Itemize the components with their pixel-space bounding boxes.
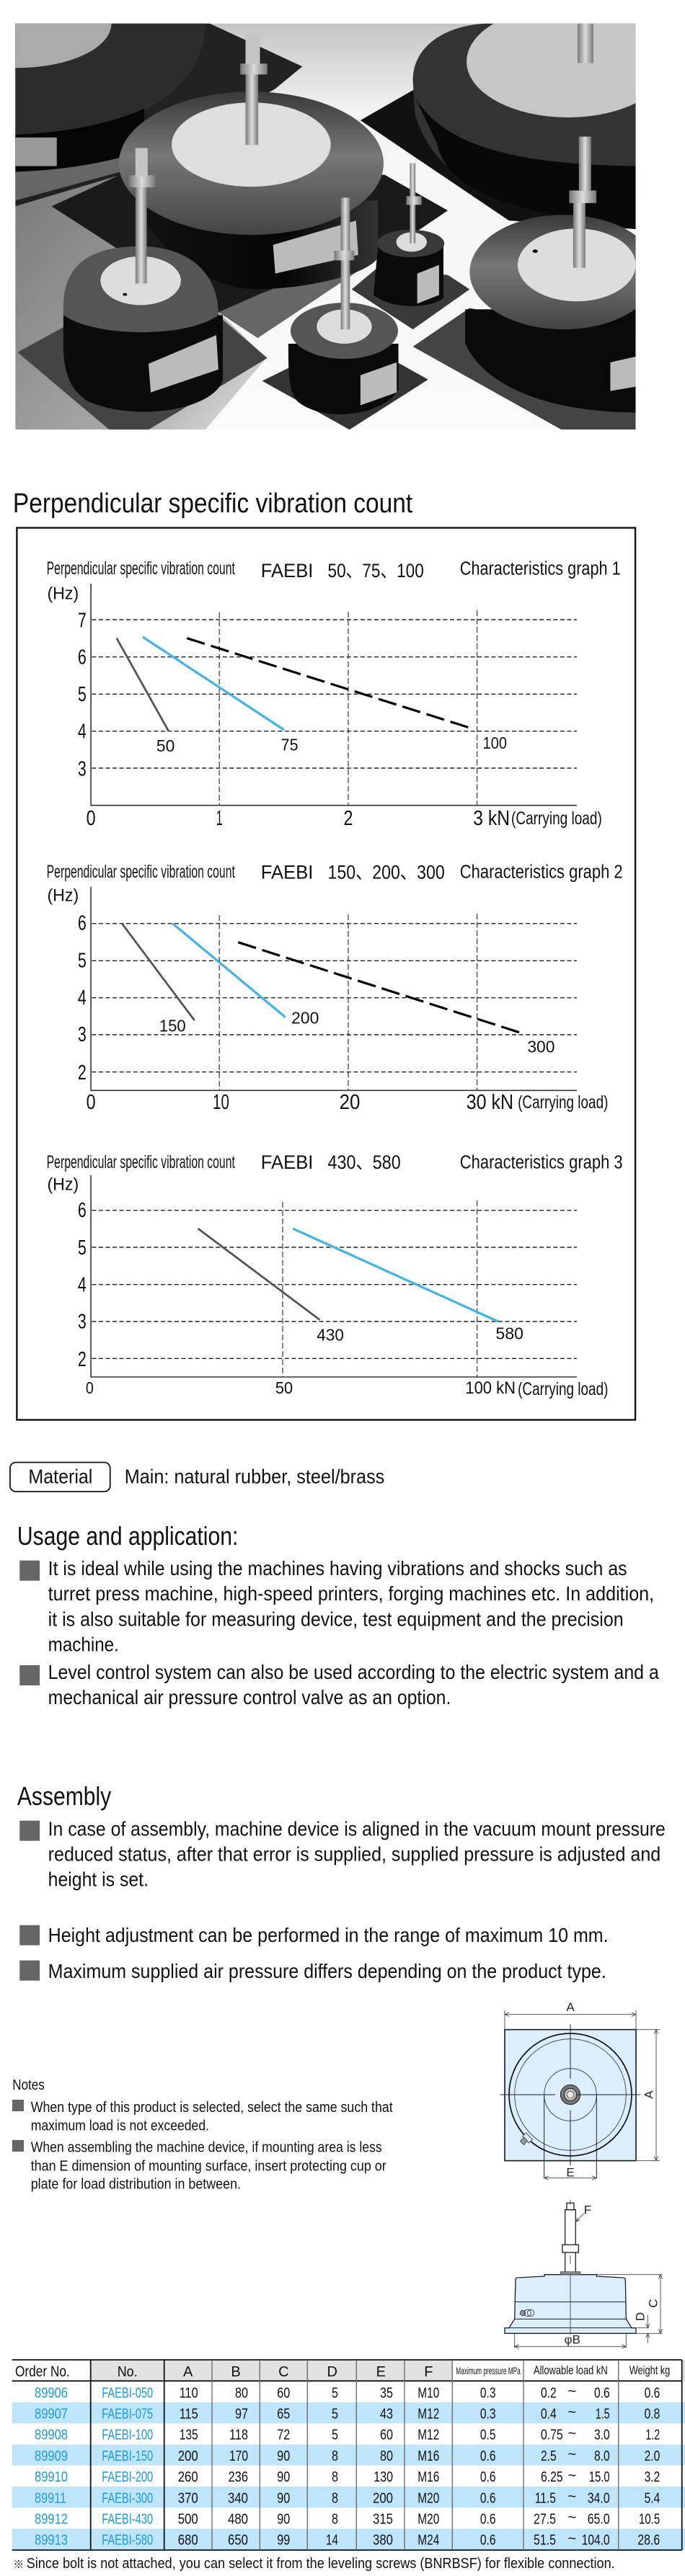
mount: center large	[51, 35, 448, 338]
table header row: A	[183, 2364, 193, 2380]
chart: characteristics graph 2: 150、200、300	[328, 861, 445, 883]
row: FAEBI-580: 680	[178, 2533, 198, 2549]
row: FAEBI-050: 110	[180, 2385, 198, 2401]
chart: characteristics graph 3: Perpendicular specific vibration count	[47, 1152, 235, 1172]
chart: characteristics graph 2: 6	[78, 912, 87, 935]
notes: When type of this product is selected, select the same such that	[31, 2099, 393, 2116]
row: FAEBI-050: 5	[332, 2385, 338, 2401]
row: FAEBI-200: 260	[178, 2469, 198, 2485]
row: FAEBI-075: 43	[380, 2407, 393, 2423]
row: FAEBI-430: 65.0	[588, 2512, 610, 2528]
row: FAEBI-050: 0.6	[594, 2385, 610, 2401]
row: FAEBI-580: 0.6	[480, 2533, 496, 2549]
row: FAEBI-050: 80	[235, 2385, 248, 2401]
row: FAEBI-430: 480	[228, 2512, 248, 2528]
row: FAEBI-300: 5.4	[645, 2490, 660, 2506]
chart: characteristics graph 3: 430	[317, 1326, 344, 1345]
row: FAEBI-200: FAEBI-200	[102, 2469, 153, 2485]
chart: characteristics graph 1: Characteristics graph 1	[460, 558, 621, 579]
row: FAEBI-150: 80	[380, 2448, 393, 2464]
chart: characteristics graph 3: 0	[86, 1378, 94, 1397]
chart: characteristics graph 2: (Carrying load)	[518, 1092, 608, 1113]
table header row: C	[278, 2364, 289, 2380]
row: FAEBI-075: 0.8	[645, 2407, 660, 2423]
chart: characteristics graph 1: 100	[483, 734, 507, 752]
row: FAEBI-300: FAEBI-300	[102, 2490, 153, 2506]
row: FAEBI-300: 90	[277, 2490, 290, 2506]
table header row: Order No.	[15, 2363, 70, 2380]
chart: characteristics graph 1: 50	[156, 736, 174, 755]
row: FAEBI-150: 8	[332, 2448, 338, 2464]
row: FAEBI-100: 1.2	[645, 2428, 660, 2443]
chart: characteristics graph 2: 10	[213, 1091, 229, 1114]
row: FAEBI-580: 99	[277, 2533, 290, 2549]
row: FAEBI-100: 5	[332, 2428, 338, 2443]
table header row: B	[231, 2364, 241, 2380]
row: FAEBI-150: 2.5	[541, 2448, 557, 2464]
row: FAEBI-050: ~	[567, 2384, 576, 2399]
chart: characteristics graph 3: 580	[496, 1324, 523, 1342]
diagram: top view with dimensions: A	[642, 2090, 656, 2099]
row: FAEBI-150: ~	[567, 2447, 576, 2463]
row: FAEBI-300: 370	[178, 2490, 198, 2506]
row: FAEBI-050: 60	[277, 2385, 290, 2401]
chart: characteristics graph 2: FAEBI	[261, 861, 313, 883]
notes: maximum load is not exceeded.	[31, 2118, 209, 2134]
material label	[10, 1463, 110, 1492]
chart: characteristics graph 2: 20	[340, 1091, 360, 1114]
row: FAEBI-150: 8.0	[594, 2448, 610, 2464]
row: FAEBI-580: 14	[326, 2533, 338, 2549]
row: FAEBI-150: 90	[277, 2448, 290, 2464]
chart: characteristics graph 1: 75	[281, 735, 299, 754]
notes: than E dimension of mounting surface, insert protecting cup or	[31, 2157, 386, 2174]
diagram: side view with dimensions: C	[647, 2299, 660, 2308]
row: FAEBI-430: 8	[332, 2512, 338, 2528]
row: FAEBI-200: 0.6	[480, 2469, 496, 2485]
chart: characteristics graph 1: 6	[78, 646, 87, 669]
chart: characteristics graph 2: Perpendicular specific vibration count	[47, 862, 235, 882]
table header row	[15, 2363, 670, 2380]
row: FAEBI-300: 8	[332, 2490, 338, 2506]
heading: assembly: Assembly	[17, 1781, 111, 1811]
row: FAEBI-200: ~	[567, 2468, 576, 2484]
row: FAEBI-100: 60	[380, 2428, 393, 2443]
row: FAEBI-075: 89907	[35, 2407, 68, 2423]
footnote: Since bolt is not attached, you can select it from the leveling screws (BNRBSF) for flexible connection.	[27, 2556, 615, 2572]
notes	[12, 2077, 393, 2193]
row: FAEBI-580: 650	[228, 2533, 248, 2549]
row: FAEBI-580: 28.6	[637, 2533, 660, 2549]
row: FAEBI-100: 0.75	[541, 2428, 563, 2443]
row: FAEBI-100: 0.5	[480, 2428, 496, 2443]
mount: front center	[262, 197, 428, 429]
row: FAEBI-430: 500	[178, 2512, 198, 2528]
row: FAEBI-100: FAEBI-100	[102, 2428, 153, 2443]
row: FAEBI-300: 34.0	[588, 2490, 610, 2506]
row: FAEBI-580: ~	[567, 2531, 576, 2546]
row: FAEBI-075: 0.3	[480, 2407, 496, 2423]
chart: characteristics graph 3: 2	[78, 1348, 87, 1371]
row: FAEBI-075: 0.4	[541, 2407, 557, 2423]
chart: characteristics graph 3: (Carrying load)	[518, 1379, 608, 1399]
text block: usage: It is ideal while using the machines having vibrations and shocks such as	[48, 1557, 627, 1579]
diagram: top view with dimensions: E	[566, 2166, 575, 2180]
row: FAEBI-150: 89909	[35, 2448, 68, 2464]
chart: characteristics graph 2: 150	[159, 1017, 186, 1035]
row: FAEBI-075: 1.5	[596, 2407, 610, 2423]
row: FAEBI-580	[35, 2531, 660, 2549]
row: FAEBI-300: 89911	[35, 2490, 66, 2506]
row: FAEBI-430: 89912	[35, 2512, 68, 2528]
row: FAEBI-050: 0.2	[541, 2385, 557, 2401]
row: FAEBI-150: 200	[178, 2448, 198, 2464]
chart: characteristics graph 1: (Hz)	[47, 584, 79, 604]
table header row: D	[327, 2364, 337, 2380]
table grid lines	[12, 2360, 682, 2550]
row: FAEBI-300: 340	[228, 2490, 248, 2506]
chart: characteristics graph 3: 100 kN	[465, 1378, 516, 1398]
diagram: side view with dimensions	[505, 2200, 663, 2348]
table header row: Allowable load kN	[534, 2363, 608, 2377]
mount: top left	[15, 23, 303, 206]
row: FAEBI-430: M20	[417, 2512, 439, 2528]
row: FAEBI-100	[35, 2425, 660, 2443]
chart: characteristics graph 2: 5	[78, 950, 87, 973]
chart: characteristics graph 1: 2	[344, 807, 353, 830]
row: FAEBI-100: 89908	[35, 2428, 68, 2443]
chart: characteristics graph 1: 7	[78, 610, 87, 633]
row: FAEBI-050: 35	[380, 2385, 393, 2401]
chart: characteristics graph 3: 3	[78, 1310, 87, 1333]
diagram: top view with dimensions: A	[566, 2000, 575, 2014]
row: FAEBI-200: 236	[228, 2469, 248, 2485]
row: FAEBI-200: 130	[374, 2469, 393, 2485]
text block: usage: it is also suitable for measuring device, test equipment and the precision	[48, 1608, 624, 1630]
table header row: No.	[118, 2364, 138, 2380]
table header row: E	[376, 2364, 386, 2380]
row: FAEBI-200: 90	[277, 2469, 290, 2485]
row: FAEBI-300: M20	[417, 2490, 439, 2506]
row: FAEBI-300: 200	[373, 2490, 393, 2506]
chart: characteristics graph 1: 3 kN	[473, 807, 510, 830]
photo: vibration mounts	[15, 23, 636, 429]
material label: Material	[28, 1465, 92, 1487]
row: FAEBI-430	[35, 2510, 660, 2528]
row: FAEBI-150	[35, 2447, 660, 2464]
mount: front right	[413, 137, 658, 429]
chart: characteristics graph 2	[47, 861, 623, 1114]
row: FAEBI-300	[35, 2489, 660, 2506]
row: FAEBI-050	[35, 2384, 660, 2401]
table header row: Maximum pressure MPa	[456, 2365, 521, 2376]
notes: plate for load distribution in between.	[31, 2176, 241, 2193]
row: FAEBI-075	[35, 2405, 660, 2423]
chart: characteristics graph 1: Perpendicular specific vibration count	[47, 558, 235, 579]
row: FAEBI-100: M12	[417, 2428, 439, 2443]
chart: characteristics graph 2: 4	[78, 986, 87, 1010]
chart: characteristics graph 2: 200	[291, 1009, 319, 1028]
row: FAEBI-100: 3.0	[594, 2428, 610, 2443]
row: FAEBI-430: 0.6	[480, 2512, 496, 2528]
chart: characteristics graph 1: 4	[78, 721, 87, 744]
notes: Notes	[12, 2077, 45, 2093]
row: FAEBI-580: FAEBI-580	[102, 2533, 153, 2549]
chart: characteristics graph 2: 0	[87, 1091, 96, 1114]
row: FAEBI-050: 89906	[35, 2385, 68, 2401]
row: FAEBI-050: FAEBI-050	[102, 2385, 153, 2401]
row: FAEBI-075: 97	[235, 2407, 248, 2423]
row: FAEBI-430: 10.5	[639, 2512, 660, 2528]
table backgrounds	[12, 2360, 685, 2550]
section heading: perpendicular specific vibration count: Perpendicular specific vibration count	[13, 489, 413, 519]
chart: characteristics graph 2: Characteristics graph 2	[460, 862, 623, 883]
row: FAEBI-150: M16	[417, 2448, 439, 2464]
chart: characteristics graph 2: 2	[78, 1061, 87, 1084]
material text: Main: natural rubber, steel/brass	[125, 1465, 384, 1487]
text block: assembly	[19, 1818, 666, 1982]
row: FAEBI-430: 315	[373, 2512, 393, 2528]
text block: assembly: height is set.	[48, 1868, 149, 1891]
chart: characteristics graph 2: 30 kN	[467, 1091, 513, 1114]
chart: characteristics graph 3: 430、580	[328, 1151, 401, 1173]
row: FAEBI-100: 118	[229, 2428, 248, 2443]
row: FAEBI-580: 51.5	[534, 2533, 556, 2549]
row: FAEBI-150: 2.0	[645, 2448, 660, 2464]
row: FAEBI-100: 72	[277, 2428, 290, 2443]
row: FAEBI-580: M24	[417, 2533, 439, 2549]
chart: characteristics graph 3: 4	[78, 1273, 87, 1296]
row: FAEBI-150: 170	[229, 2448, 248, 2464]
row: FAEBI-050: 0.3	[480, 2385, 496, 2401]
row: FAEBI-050: 0.6	[645, 2385, 660, 2401]
chart: characteristics graph 2: (Hz)	[47, 886, 79, 906]
mount: small rear	[352, 164, 469, 329]
diagram: side view with dimensions: φB	[565, 2333, 580, 2347]
row: FAEBI-580: 380	[373, 2533, 393, 2549]
text block: usage: machine.	[48, 1634, 119, 1656]
chart: characteristics graph 1: 50、75、100	[328, 560, 424, 581]
row: FAEBI-075: 115	[180, 2407, 198, 2423]
specification table	[12, 2360, 685, 2550]
diagram: top view with dimensions	[500, 2000, 660, 2180]
chart: characteristics graph 1: 0	[87, 807, 96, 830]
text block: assembly: Height adjustment can be performed in the range of maximum 10 mm.	[48, 1924, 609, 1946]
text block: usage	[19, 1557, 659, 1708]
diagram: side view with dimensions: D	[634, 2312, 648, 2321]
chart: characteristics graph 3: 6	[78, 1199, 87, 1222]
chart: characteristics graph 2: 3	[78, 1023, 87, 1046]
text block: usage: mechanical air pressure control valve as an option.	[48, 1686, 451, 1708]
table header row: F	[424, 2364, 433, 2380]
row: FAEBI-200: 89910	[35, 2469, 68, 2485]
chart: characteristics graph 1	[47, 558, 621, 830]
chart: characteristics graph 3: (Hz)	[47, 1175, 79, 1195]
chart: characteristics graph 3: Characteristics graph 3	[460, 1152, 623, 1173]
row: FAEBI-075: FAEBI-075	[102, 2407, 153, 2423]
row: FAEBI-200	[35, 2468, 660, 2485]
chart: characteristics graph 1: 1	[216, 807, 223, 830]
footnote: ※	[13, 2559, 24, 2571]
row: FAEBI-430: 90	[277, 2512, 290, 2528]
diagram: side view with dimensions: F	[584, 2203, 591, 2216]
row: FAEBI-430: FAEBI-430	[102, 2512, 153, 2528]
row: FAEBI-200: 15.0	[589, 2469, 610, 2485]
row: FAEBI-300: ~	[567, 2489, 576, 2505]
text block: assembly: Maximum supplied air pressure differs depending on the product type.	[48, 1960, 606, 1982]
row: FAEBI-300: 0.6	[480, 2490, 496, 2506]
row: FAEBI-150: FAEBI-150	[102, 2448, 153, 2464]
chart: characteristics graph 1: FAEBI	[261, 560, 313, 581]
row: FAEBI-580: 104.0	[582, 2533, 610, 2549]
chart: characteristics graph 1: (Carrying load)	[511, 808, 602, 829]
row: FAEBI-200: 8	[332, 2469, 338, 2485]
row: FAEBI-200: M16	[417, 2469, 439, 2485]
chart: characteristics graph 1: 5	[78, 683, 87, 706]
row: FAEBI-100: ~	[567, 2425, 576, 2441]
row: FAEBI-200: 3.2	[645, 2469, 660, 2485]
chart: characteristics graph 3	[47, 1151, 623, 1399]
mount: top right	[361, 23, 636, 229]
row: FAEBI-100: 135	[180, 2428, 198, 2443]
chart: characteristics graph 1: 3	[78, 758, 87, 781]
row: FAEBI-075: 65	[277, 2407, 290, 2423]
row: FAEBI-200: 6.25	[541, 2469, 563, 2485]
row: FAEBI-580: 89913	[35, 2533, 68, 2549]
row: FAEBI-075: ~	[567, 2405, 576, 2420]
chart: characteristics graph 2: 300	[527, 1038, 555, 1056]
row: FAEBI-430: ~	[567, 2510, 576, 2526]
notes: When assembling the machine device, if mounting area is less	[31, 2139, 382, 2156]
chart: characteristics graph 3: FAEBI	[261, 1151, 313, 1173]
chart: characteristics graph 3: 5	[78, 1236, 87, 1260]
row: FAEBI-430: 27.5	[534, 2512, 556, 2528]
row: FAEBI-150: 0.6	[480, 2448, 496, 2464]
chart: characteristics graph 3: 50	[275, 1378, 293, 1397]
row: FAEBI-300: 11.5	[535, 2490, 556, 2506]
row: FAEBI-050: M10	[417, 2385, 439, 2401]
row: FAEBI-075: 5	[332, 2407, 338, 2423]
panel: characteristics graphs	[17, 527, 635, 1420]
heading: usage and application: Usage and application:	[17, 1521, 238, 1551]
table header row: Weight kg	[629, 2363, 670, 2377]
mount: front left	[17, 148, 268, 429]
row: FAEBI-075: M12	[417, 2407, 439, 2423]
